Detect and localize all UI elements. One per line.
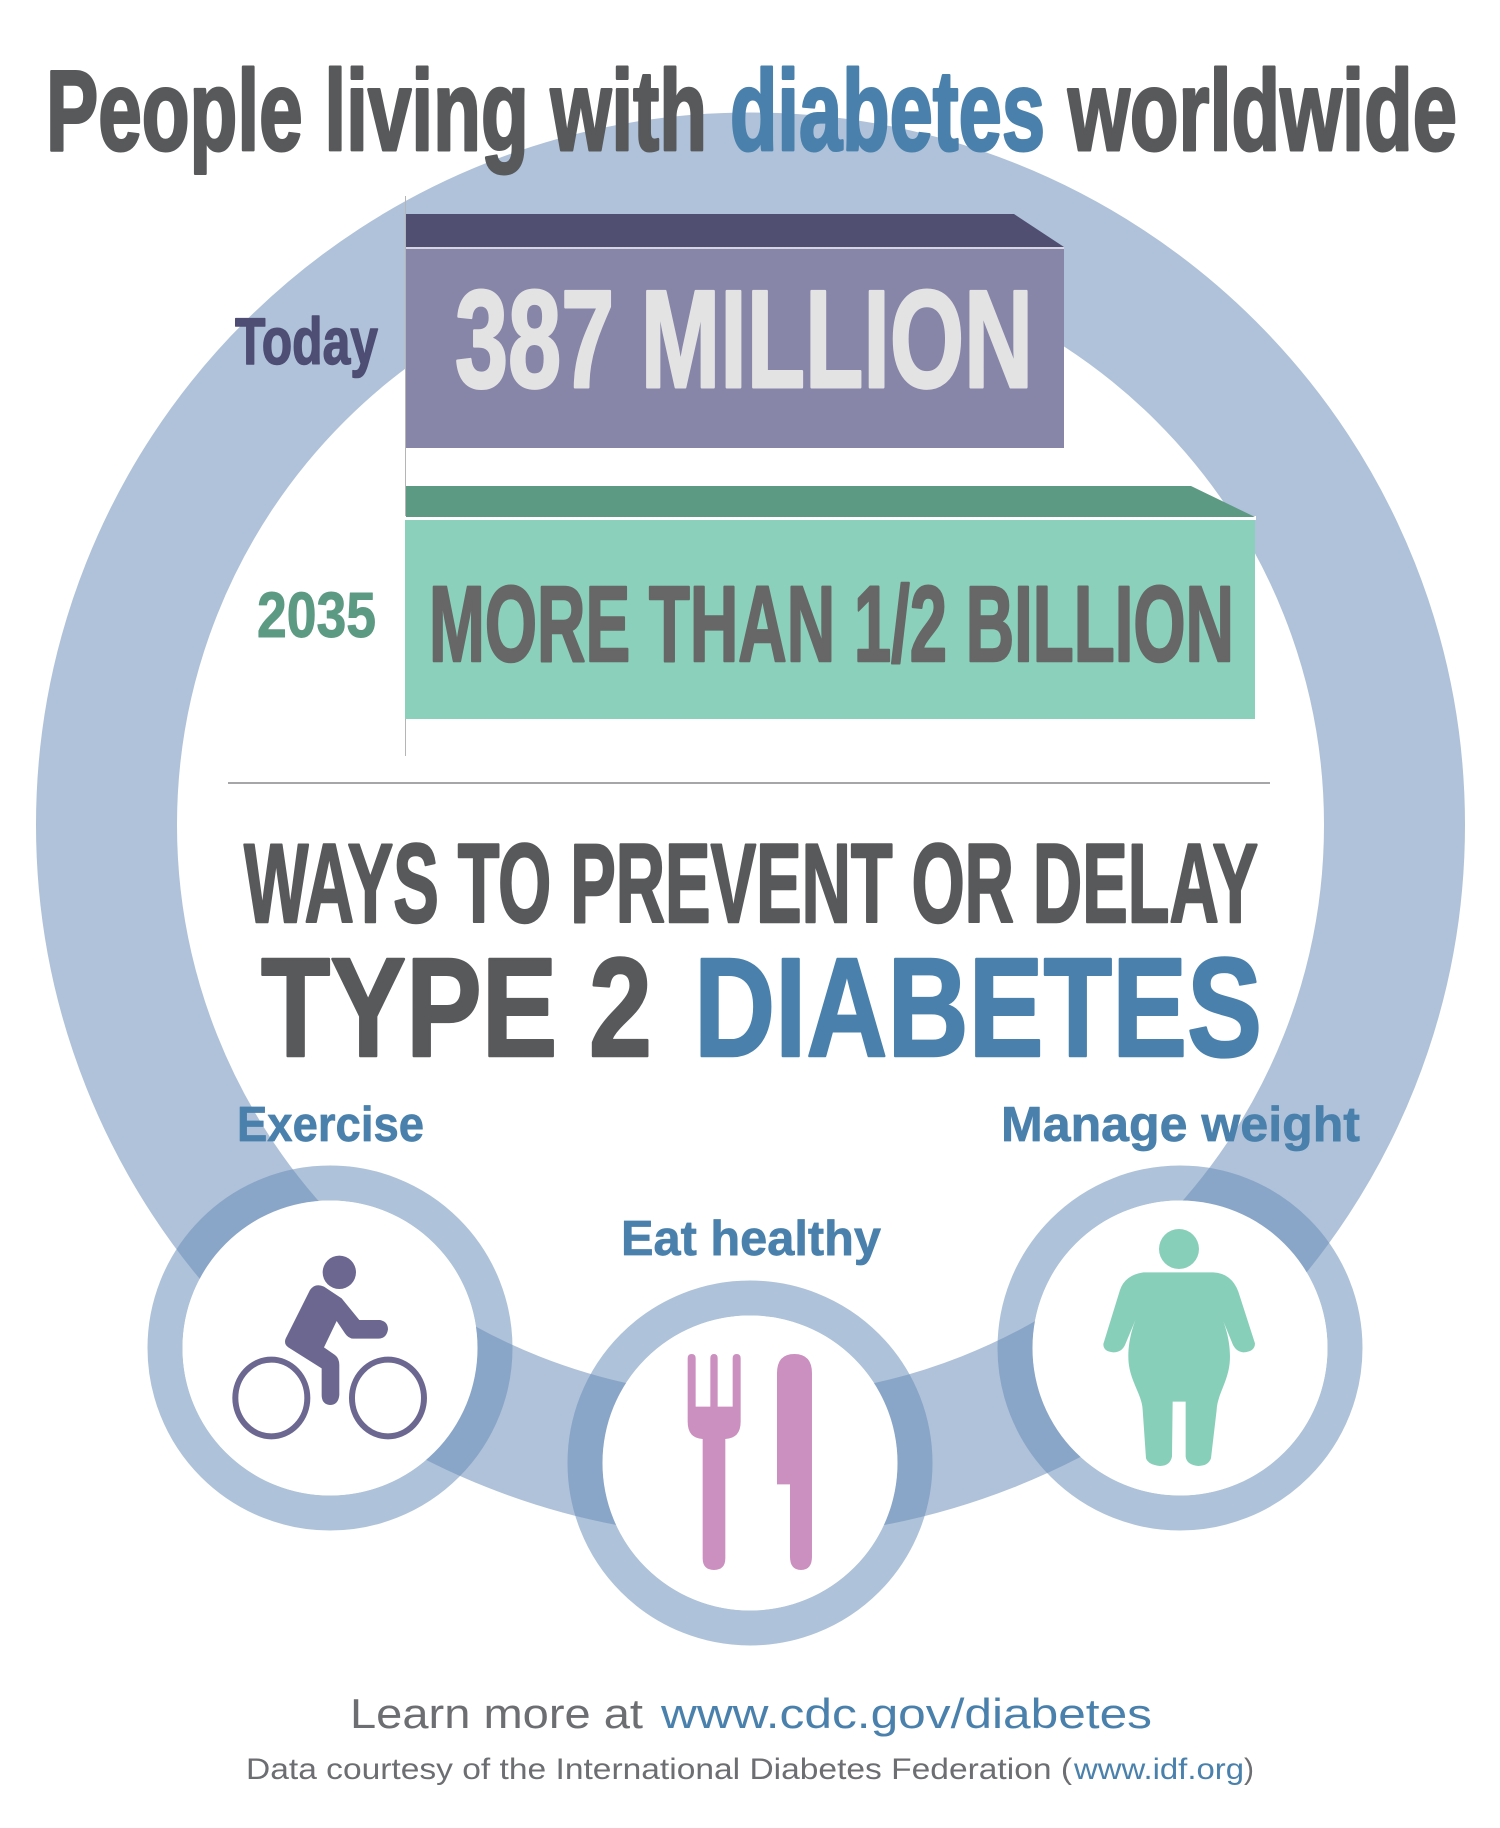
bar: 2035 more than half a billion [405,486,1256,719]
footer: learn more: Learn more at [350,1690,643,1737]
label: Eat healthy: Eat healthy [621,1212,881,1266]
heading: type 2 diabetes: TYPE 2 [261,928,652,1086]
footer: data credit: ) [1244,1753,1254,1786]
circle: exercise [165,1183,495,1513]
icon: cyclist [235,1256,424,1436]
footer: data credit: Data courtesy of the International Diabetes Federation ( [246,1753,1072,1786]
footer: data credit: www.idf.org [1073,1753,1244,1786]
label: Manage weight: Manage weight [1001,1098,1360,1152]
heading: type 2 diabetes: DIABETES [694,928,1262,1086]
footer: learn more: www.cdc.gov/diabetes [660,1690,1152,1737]
label: Exercise: Exercise [237,1098,424,1152]
bar: today 387 million [406,214,1064,448]
title [46,48,1457,175]
title: People living with [46,48,707,175]
bar: today 387 million: 387 MILLION [455,262,1033,417]
heading: type 2 diabetes [261,928,1262,1086]
circle: manage weight [1015,1183,1345,1513]
chart axis line [405,196,406,756]
icon: person [1103,1229,1255,1466]
footer: learn more [350,1690,1152,1737]
circle: eat healthy [585,1298,915,1628]
label: Today: Today [235,304,378,378]
large background ring [106,183,1394,1467]
icon: fork and knife [688,1354,812,1570]
title: diabetes [730,48,1045,175]
label: 2035: 2035 [257,579,376,651]
